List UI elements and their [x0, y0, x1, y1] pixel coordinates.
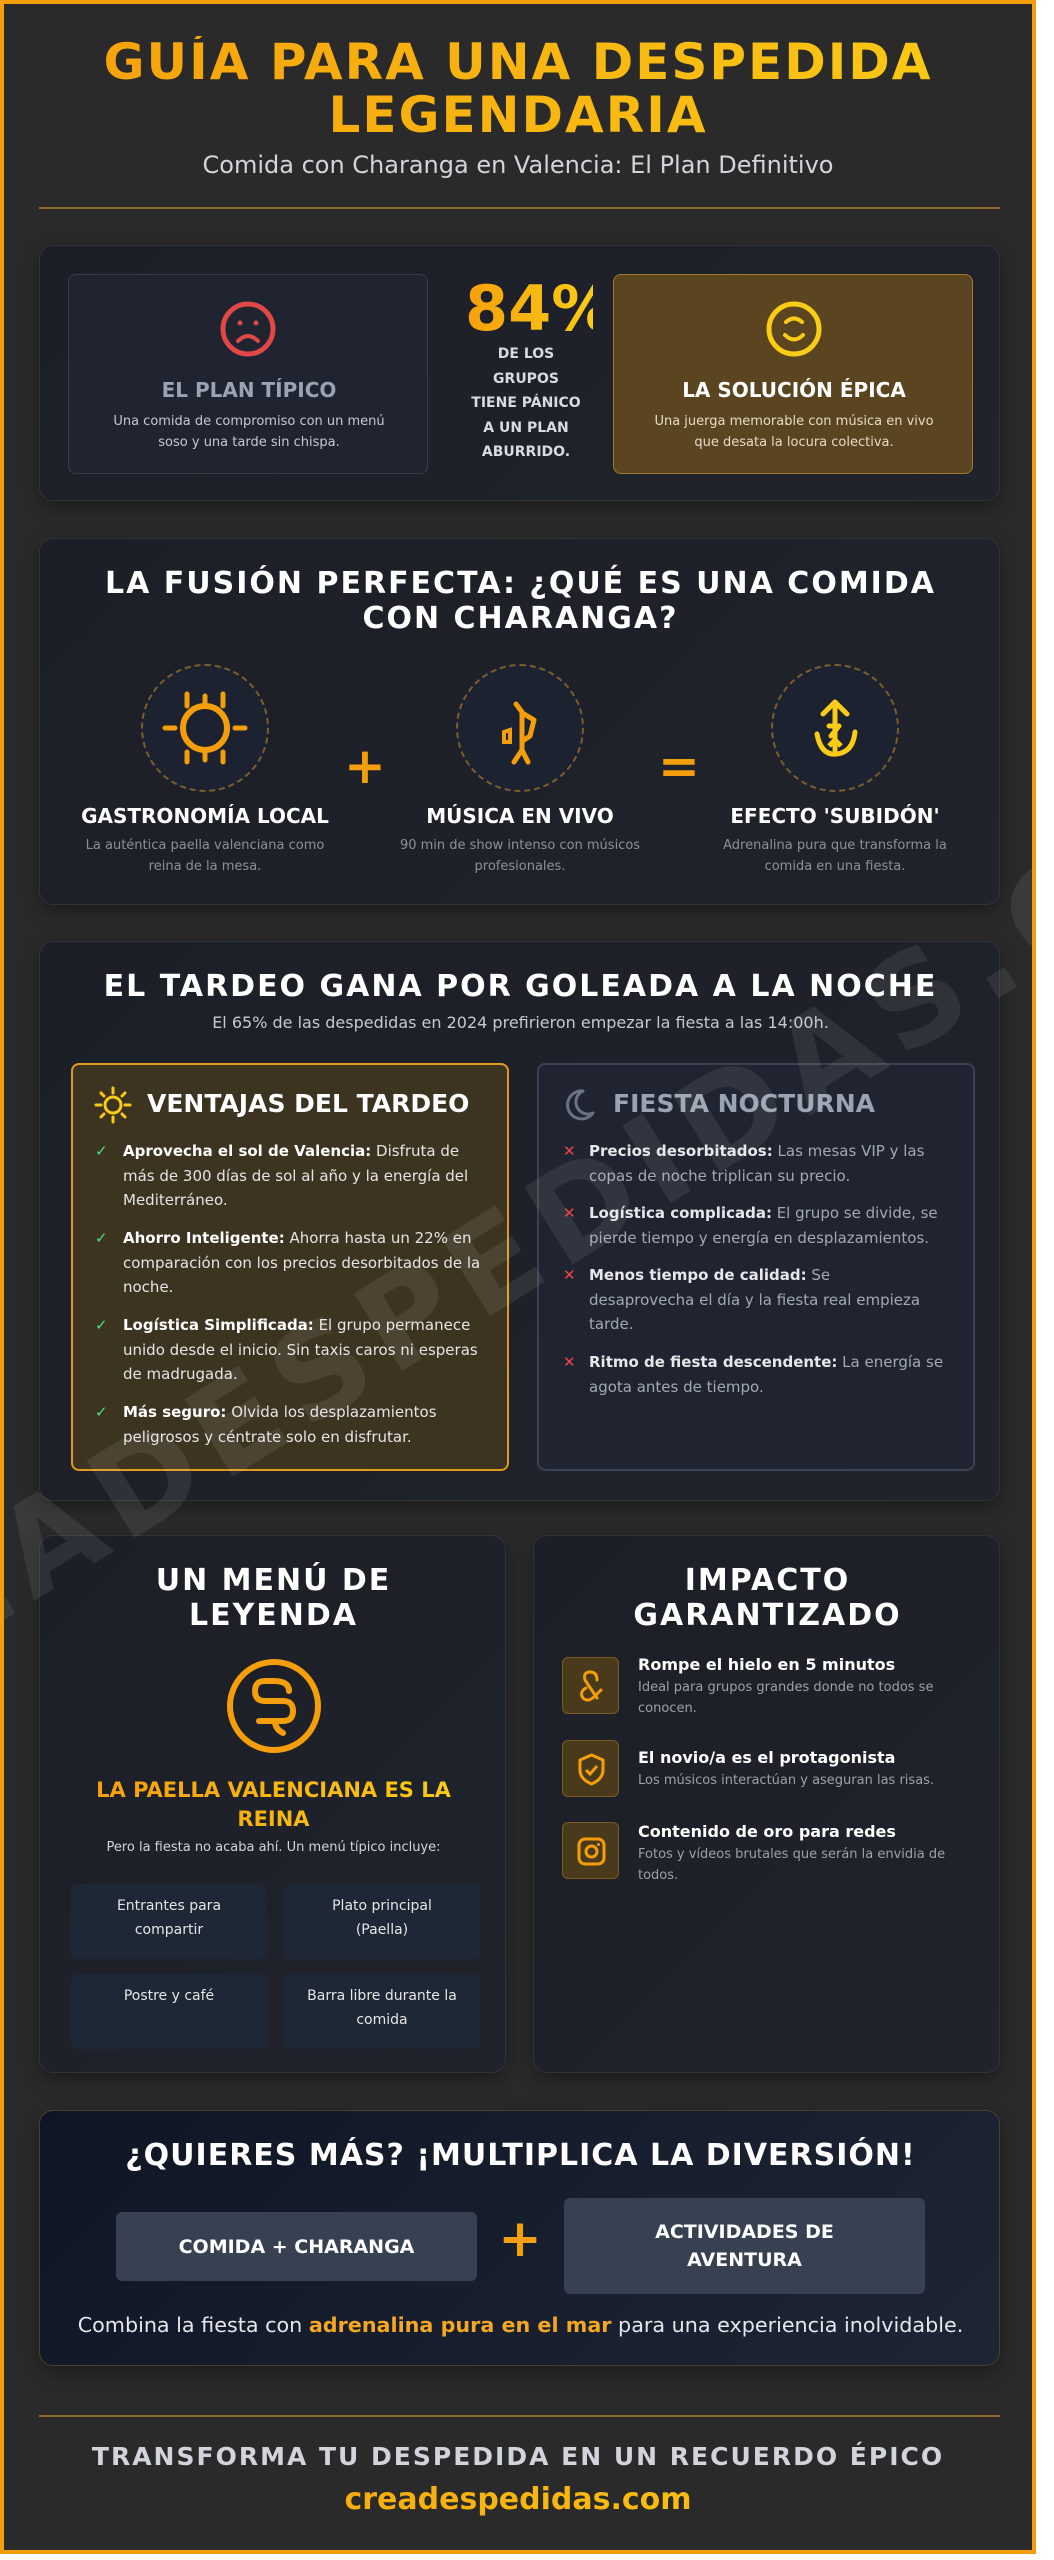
item: redes	[562, 1822, 945, 1883]
button: comida + charanga: COMIDA + CHARANGA	[179, 2236, 414, 2258]
icon: moon	[566, 1089, 594, 1120]
button: actividades de aventura	[564, 2198, 925, 2294]
icon: sun	[94, 1086, 132, 1124]
subheading: LA PAELLA VALENCIANA ES LA REINA	[96, 1778, 451, 1831]
stat: 84%: A UN PLAN	[483, 420, 569, 436]
label: efecto: EFECTO 'SUBIDÓN'	[730, 804, 940, 828]
box: fiesta nocturna: Precios desorbitados: Las mesas VIP y las copas de noche triplican su precio.	[589, 1142, 924, 1184]
box: ventajas del tardeo: ✓	[95, 1142, 108, 1160]
heading: EL TARDEO GANA POR GOLEADA A LA NOCHE	[104, 969, 937, 1004]
heading: LA FUSIÓN PERFECTA: ¿QUÉ ES UNA COMIDA	[105, 566, 936, 601]
panel: la fusión perfecta: La auténtica paella valenciana como reina de la mesa.	[86, 838, 324, 874]
box: ventajas del tardeo	[71, 1063, 509, 1471]
panel: la fusión perfecta	[39, 538, 1000, 905]
heading	[633, 1563, 902, 1633]
title: GUÍA PARA UNA DESPEDIDA	[103, 33, 933, 91]
subtitle: El 65% de las despedidas en 2024 prefirieron empezar la fiesta a las 14:00h.	[212, 1013, 829, 1032]
box: fiesta nocturna: Menos tiempo de calidad: Se	[589, 1266, 830, 1284]
item: protagonista: Los músicos interactúan y aseguran las risas.	[638, 1773, 934, 1788]
panel: la fusión perfecta: 90 min de show intenso con músicos profesionales.	[400, 838, 640, 874]
item: rompe el hielo	[562, 1655, 933, 1716]
box: fiesta nocturna: ✕	[563, 1353, 576, 1371]
label: música: MÚSICA EN VIVO	[426, 804, 614, 828]
footer url	[4, 2482, 1032, 2517]
stat: 84%: DE LOS	[498, 346, 554, 362]
menu items: Barra libre durante la	[307, 1988, 457, 2004]
heading: IMPACTO	[685, 1563, 850, 1598]
menu items: (Paella)	[356, 1922, 408, 1938]
box: ventajas del tardeo: ✓	[95, 1229, 108, 1247]
item: rompe el hielo: Rompe el hielo en 5 minutos	[638, 1655, 895, 1674]
title: LEGENDARIA	[328, 86, 708, 144]
item: rompe el hielo: Ideal para grupos grandes donde no todos se conocen.	[638, 1680, 933, 1716]
icon: música	[456, 664, 584, 792]
item: redes: Contenido de oro para redes	[638, 1822, 896, 1841]
box: ventajas del tardeo: Más seguro: Olvida los desplazamientos peligrosos y céntrate solo en disfrutar.	[123, 1403, 437, 1446]
heading: LA SOLUCIÓN ÉPICA	[682, 378, 906, 402]
subtitle: Comida con Charanga en Valencia: El Plan Definitivo	[203, 151, 833, 179]
box: fiesta nocturna: ✕	[563, 1204, 576, 1222]
panel: la fusión perfecta: Adrenalina pura que transforma la comida en una fiesta.	[723, 838, 947, 874]
heading: FIESTA NOCTURNA	[613, 1089, 875, 1118]
icon: paella	[227, 1659, 321, 1753]
text: Combina la fiesta con adrenalina pura en el mar para una experiencia inolvidable.	[78, 2313, 963, 2337]
equals: =	[658, 737, 700, 795]
box: ventajas del tardeo: ✓	[95, 1316, 108, 1334]
menu items: Postre y café	[124, 1988, 214, 2004]
menu items: Entrantes para	[117, 1898, 221, 1914]
heading: GARANTIZADO	[633, 1598, 902, 1633]
label: gastronomía: GASTRONOMÍA LOCAL	[81, 804, 329, 828]
box: fiesta nocturna: Logística complicada: El grupo se divide, se pierde tiempo y energía en desplazamientos.	[589, 1204, 938, 1246]
title	[4, 36, 1032, 142]
panel: tardeo vs noche	[39, 941, 1000, 1501]
plus: +	[344, 737, 386, 795]
icon: sad face	[220, 302, 276, 356]
menu items	[71, 1884, 480, 2049]
button: actividades de aventura: AVENTURA	[687, 2249, 802, 2271]
box: fiesta nocturna: ✕	[563, 1142, 576, 1160]
box: ventajas del tardeo: Logística Simplificada: El grupo permanece unido desde el inicio. Sin taxis caros ni esperas de madrugada.	[123, 1316, 478, 1383]
icon: smile	[766, 302, 822, 356]
text: Una comida de compromiso con un menú soso y una tarde sin chispa.	[113, 414, 385, 450]
menu items: compartir	[135, 1922, 203, 1938]
heading	[105, 564, 936, 636]
button: actividades de aventura: ACTIVIDADES DE	[655, 2221, 834, 2243]
box: ventajas del tardeo: Aprovecha el sol de Valencia: Disfruta de más de 300 días de sol al año y la energía del Mediterráneo.	[123, 1142, 468, 1209]
text: Una juerga memorable con música en vivo que desata la locura colectiva.	[654, 414, 934, 450]
card: el plan típico	[68, 274, 428, 474]
heading: LEYENDA	[189, 1598, 358, 1633]
heading: EL PLAN TÍPICO	[162, 378, 336, 402]
heading: CON CHARANGA?	[362, 601, 679, 636]
item: redes: Fotos y vídeos brutales que serán la envidia de todos.	[638, 1847, 945, 1883]
heading: UN MENÚ DE	[156, 1563, 391, 1598]
heading: VENTAJAS DEL TARDEO	[147, 1089, 469, 1118]
icon: gastronomía	[141, 664, 269, 792]
panel: multiplica la diversión	[39, 2110, 1000, 2366]
box: fiesta nocturna: Ritmo de fiesta descendente: La energía se agota antes de tiempo.	[589, 1353, 943, 1396]
heading: ¿QUIERES MÁS? ¡MULTIPLICA LA DIVERSIÓN!	[125, 2138, 916, 2173]
button: comida + charanga	[116, 2212, 477, 2281]
heading	[156, 1562, 391, 1633]
stat: 84%: TIENE PÁNICO	[471, 395, 581, 411]
box: fiesta nocturna: desaprovecha el día y la fiesta real empieza tarde.	[589, 1290, 920, 1333]
plus: +	[498, 2209, 542, 2269]
footer tagline: TRANSFORMA TU DESPEDIDA EN UN RECUERDO ÉPICO	[92, 2442, 944, 2471]
icon: efecto subidón	[771, 664, 899, 792]
text: Pero la fiesta no acaba ahí. Un menú típico incluye:	[106, 1840, 441, 1855]
panel: un menú de leyenda	[39, 1535, 506, 2073]
box: fiesta nocturna	[537, 1063, 975, 1471]
menu items: comida	[356, 2012, 408, 2028]
item: protagonista	[562, 1740, 934, 1797]
box: ventajas del tardeo: ✓	[95, 1403, 108, 1421]
stat: 84%: ABURRIDO.	[482, 444, 570, 460]
box: fiesta nocturna: ✕	[563, 1266, 576, 1284]
stat: 84%: GRUPOS	[493, 370, 559, 386]
panel: plan típico vs solución	[39, 245, 1000, 501]
footer url: creadespedidas.com	[344, 2482, 692, 2517]
panel: impacto garantizado	[533, 1535, 1000, 2073]
item: protagonista: El novio/a es el protagonista	[638, 1748, 895, 1767]
card: la solución épica	[613, 274, 973, 474]
menu items: Plato principal	[332, 1898, 432, 1914]
box: ventajas del tardeo: Ahorro Inteligente: Ahorra hasta un 22% en comparación con los precios desorbitados de la noche.	[123, 1229, 480, 1296]
stat: 84%	[465, 276, 593, 460]
